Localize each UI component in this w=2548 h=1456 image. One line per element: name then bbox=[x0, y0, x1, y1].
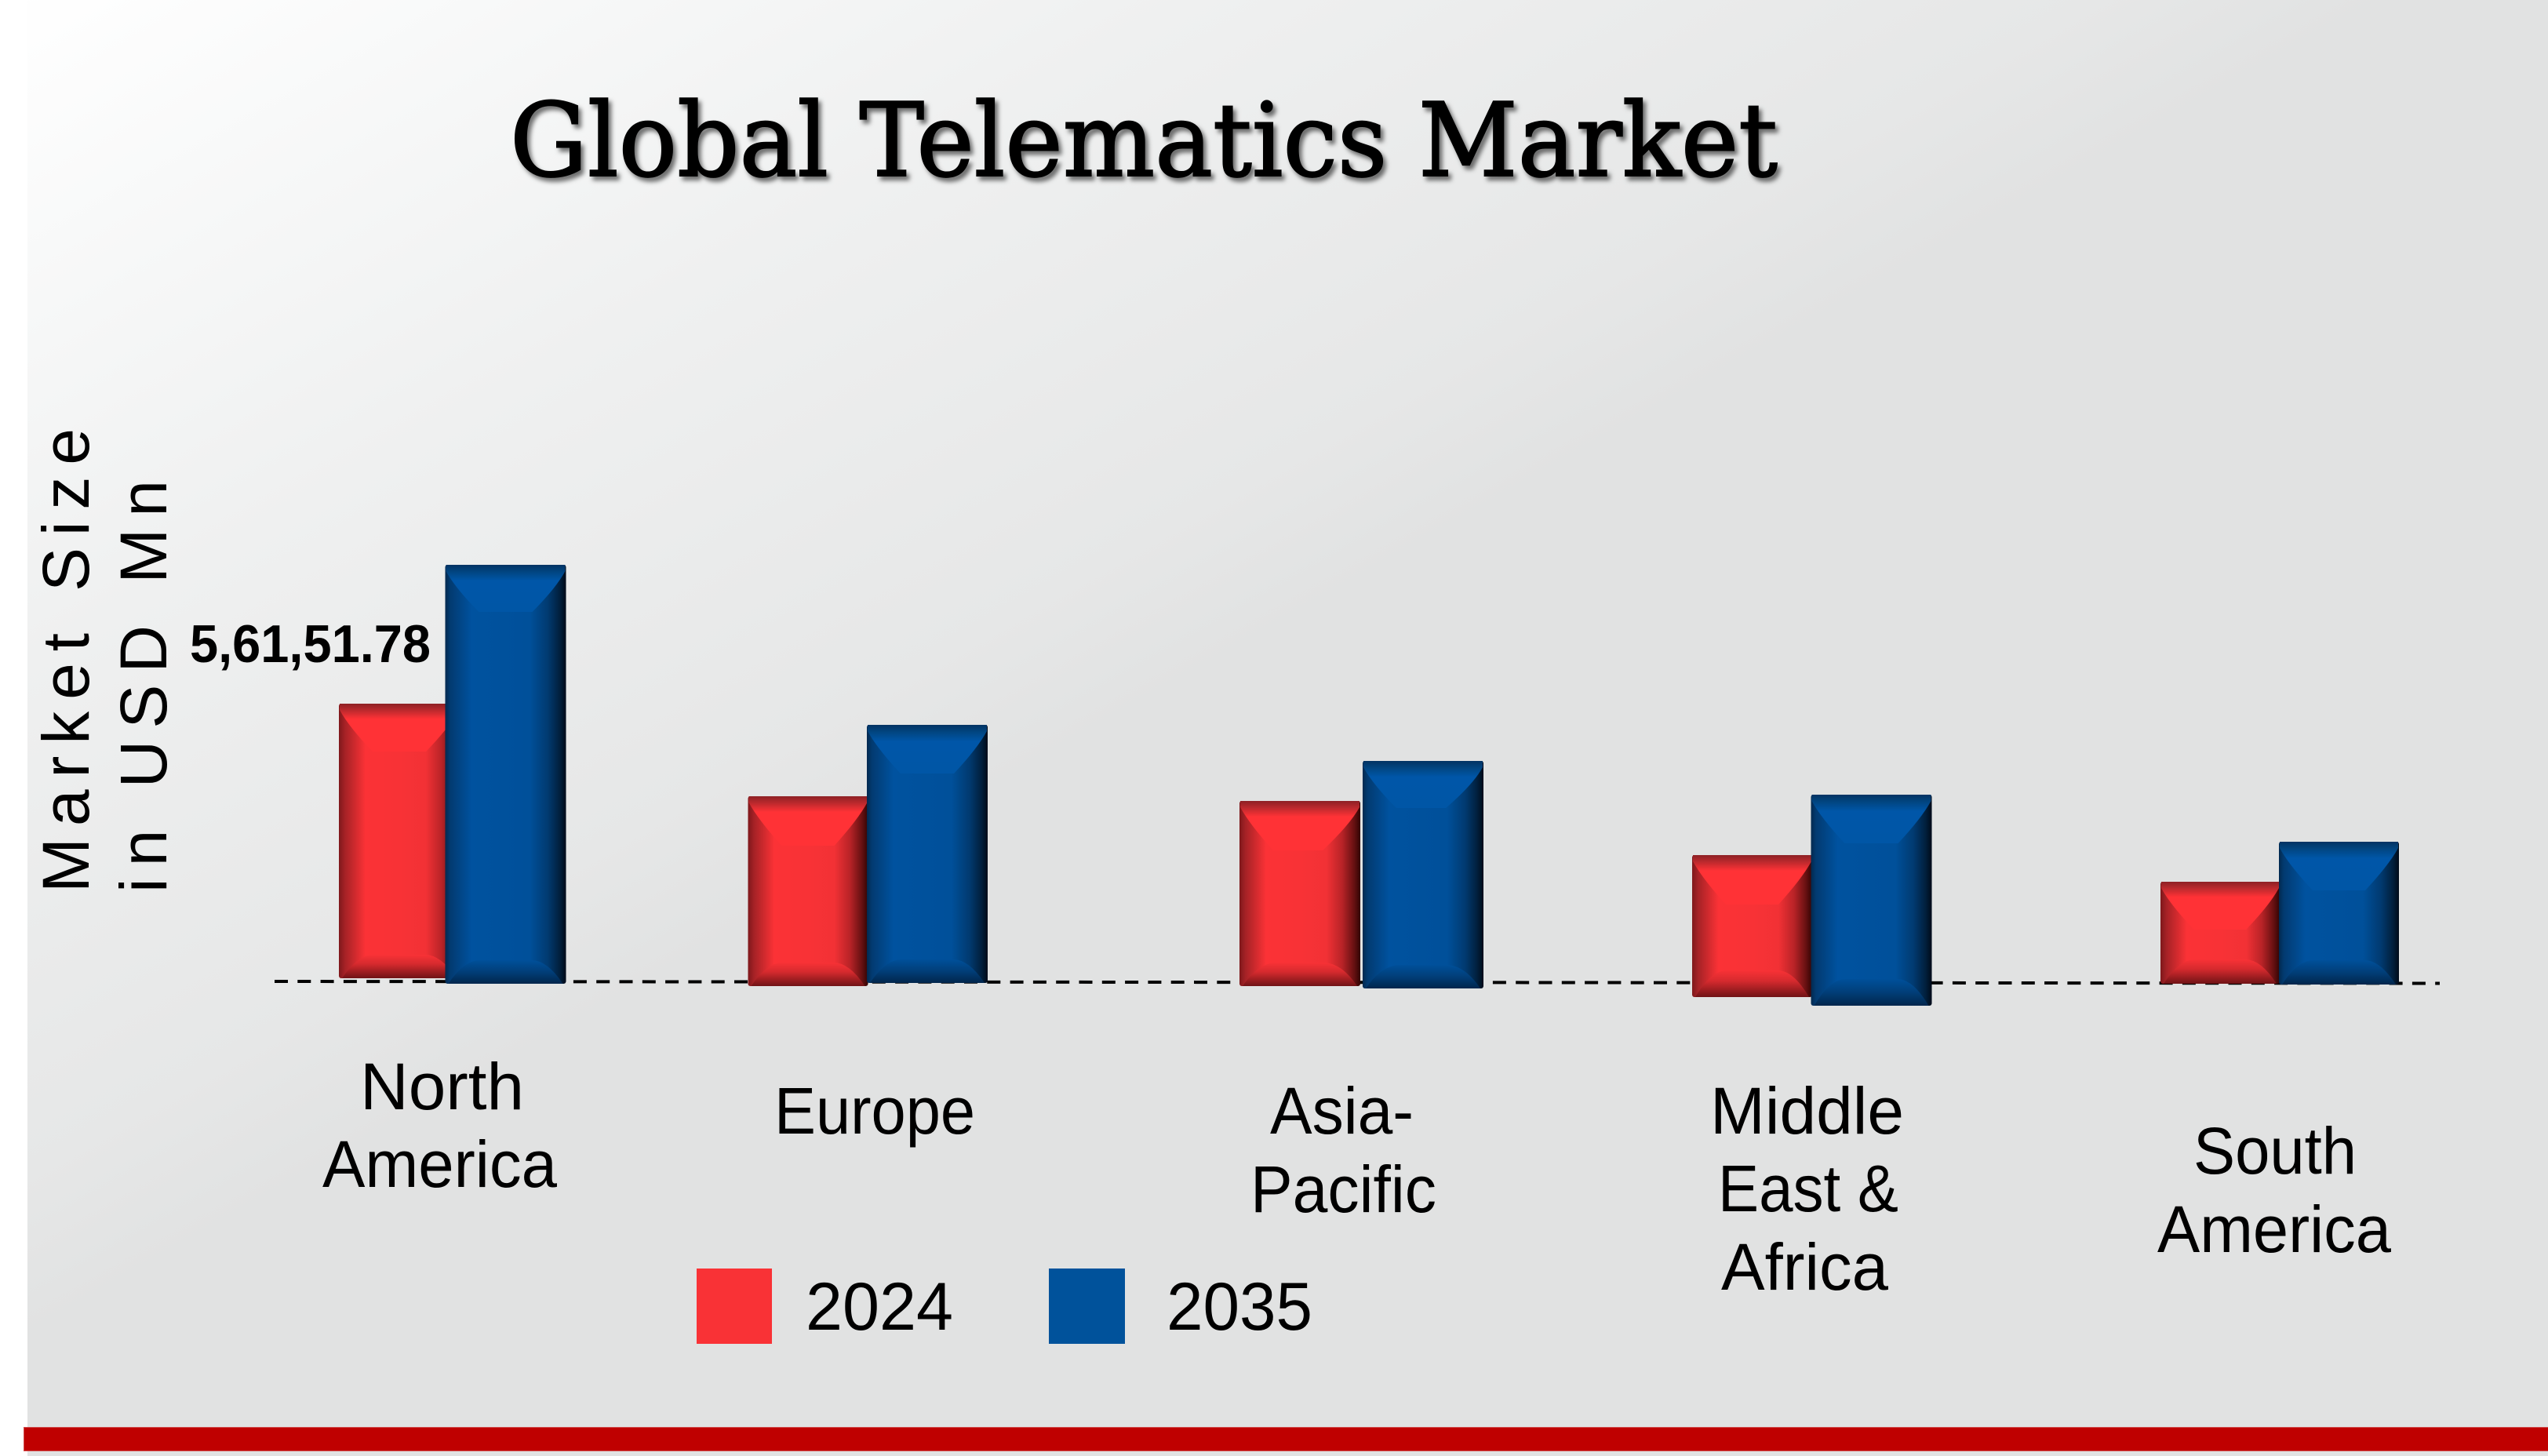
legend swatch: 2024 bbox=[697, 1269, 772, 1344]
bars: Middle East and Africa bbox=[1692, 795, 1931, 1006]
category label: Asia-Pacific bbox=[1250, 1074, 1436, 1226]
legend bbox=[697, 1269, 1312, 1345]
legend label: 2024: 2024 bbox=[806, 1269, 953, 1345]
category label: North America bbox=[322, 1050, 557, 1201]
y axis title: Market Size bbox=[29, 428, 103, 893]
category label: Middle East and Africa: Africa bbox=[1721, 1230, 1888, 1304]
bar: South America 2024 bbox=[2160, 882, 2280, 984]
bar: Europe 2035 bbox=[867, 725, 988, 983]
bar: Asia-Pacific 2035 bbox=[1363, 761, 1483, 988]
y axis title: in USD Mn bbox=[107, 480, 180, 893]
bar: North America 2035 bbox=[446, 565, 566, 984]
bar: Middle East and Africa 2035 bbox=[1811, 795, 1931, 1006]
category label: South America bbox=[2157, 1114, 2391, 1266]
bar chart bbox=[339, 565, 2399, 1006]
legend label: 2035: 2035 bbox=[1167, 1269, 1312, 1345]
category label: Middle East and Africa bbox=[1710, 1074, 1904, 1304]
bars: South America bbox=[2160, 842, 2399, 985]
bar: Asia-Pacific 2024 bbox=[1239, 801, 1360, 986]
legend swatch: 2035 bbox=[1049, 1269, 1125, 1344]
title: Global Telematics Market bbox=[510, 81, 1778, 200]
category label: North America: America bbox=[322, 1127, 557, 1201]
bar: Middle East and Africa 2024 bbox=[1692, 855, 1812, 997]
category label: South America: South bbox=[2193, 1114, 2357, 1188]
y axis title bbox=[29, 428, 180, 893]
bar: South America 2035 bbox=[2279, 842, 2399, 985]
bars: Asia-Pacific bbox=[1239, 761, 1483, 988]
category label: Asia-Pacific: Asia- bbox=[1270, 1074, 1414, 1148]
category label: Asia-Pacific: Pacific bbox=[1250, 1152, 1436, 1226]
category label: Europe: Europe bbox=[774, 1074, 975, 1148]
footer red band bbox=[24, 1428, 2548, 1451]
category label: Middle East and Africa: Middle bbox=[1710, 1074, 1904, 1148]
category label: North America: North bbox=[360, 1050, 524, 1123]
category label: Middle East and Africa: East & bbox=[1718, 1152, 1898, 1225]
bars: Europe bbox=[748, 725, 988, 986]
category label: South America: America bbox=[2157, 1192, 2391, 1266]
bars: North America bbox=[339, 565, 566, 984]
value label: North America 2024: 5,61,51.78 bbox=[190, 614, 431, 674]
bar: North America 2024 bbox=[339, 704, 460, 978]
bar: Europe 2024 bbox=[748, 796, 868, 986]
